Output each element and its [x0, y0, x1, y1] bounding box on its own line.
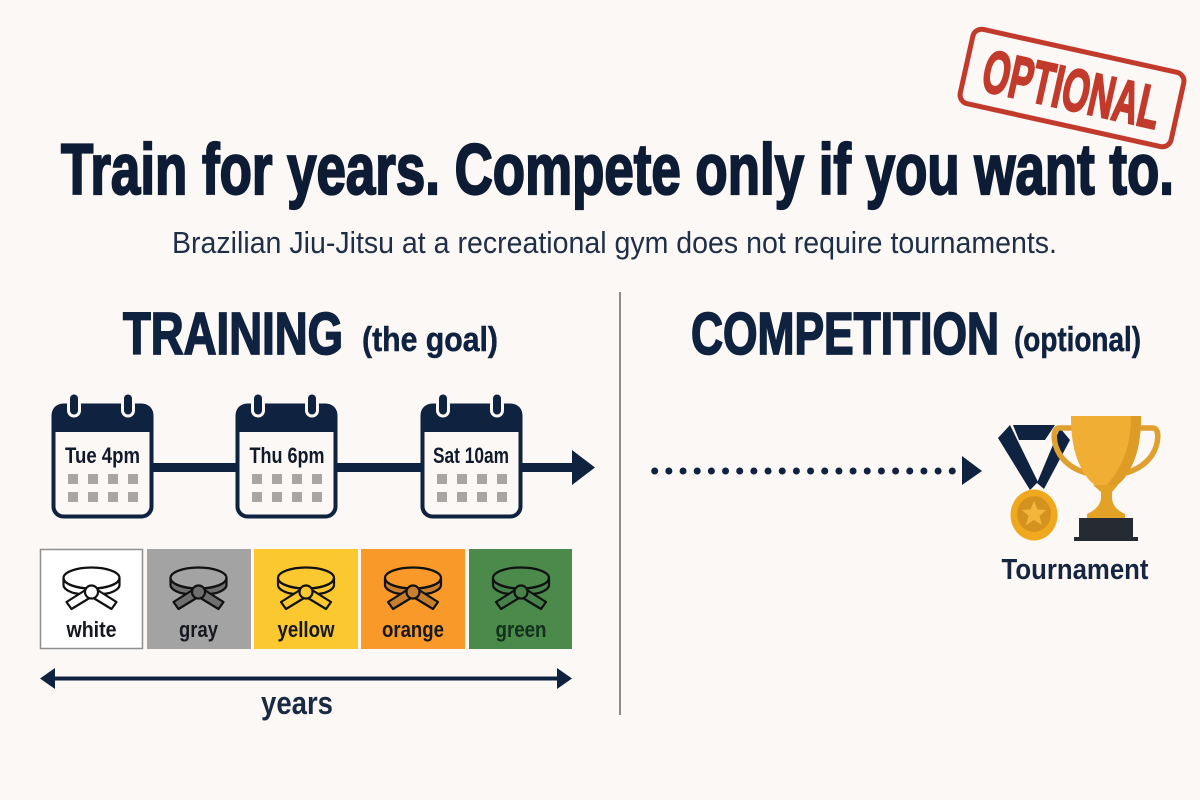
- calendar: Thu 6pm: Thu 6pm: [250, 443, 324, 468]
- dotted arrow: [655, 456, 982, 485]
- tournament label: Tournament: [1002, 554, 1149, 586]
- belt: orange: [361, 549, 465, 649]
- heading: competition: (optional): [1014, 321, 1141, 359]
- belt: gray: [147, 549, 251, 649]
- belt: white: [40, 550, 142, 648]
- calendar: Sat 10am: [421, 394, 522, 516]
- calendar: Tue 4pm: Tue 4pm: [65, 443, 140, 468]
- belt: green: green: [496, 617, 546, 642]
- icon: trophy: [1054, 416, 1158, 541]
- icon: medal: [998, 425, 1070, 540]
- stamp: optional: [958, 28, 1186, 148]
- belt: orange: orange: [382, 617, 444, 642]
- years label: years: [261, 685, 333, 721]
- subtitle: Brazilian Jiu-Jitsu at a recreational gym does not require tournaments.: [172, 225, 1057, 260]
- calendar: Thu 6pm: [236, 394, 337, 516]
- belt: green: [469, 549, 572, 649]
- timeline arrow: [150, 450, 595, 485]
- heading: competition: COMPETITION: [691, 301, 999, 367]
- calendar: Tue 4pm: [52, 394, 153, 516]
- belt: yellow: yellow: [278, 617, 335, 642]
- belt: gray: gray: [179, 617, 219, 642]
- heading: training: (the goal): [362, 321, 498, 359]
- belt: yellow: [254, 549, 358, 649]
- years arrow: [40, 668, 572, 689]
- belt: white: white: [66, 617, 116, 642]
- heading: training: TRAINING: [123, 301, 343, 367]
- calendar: Sat 10am: Sat 10am: [433, 443, 509, 468]
